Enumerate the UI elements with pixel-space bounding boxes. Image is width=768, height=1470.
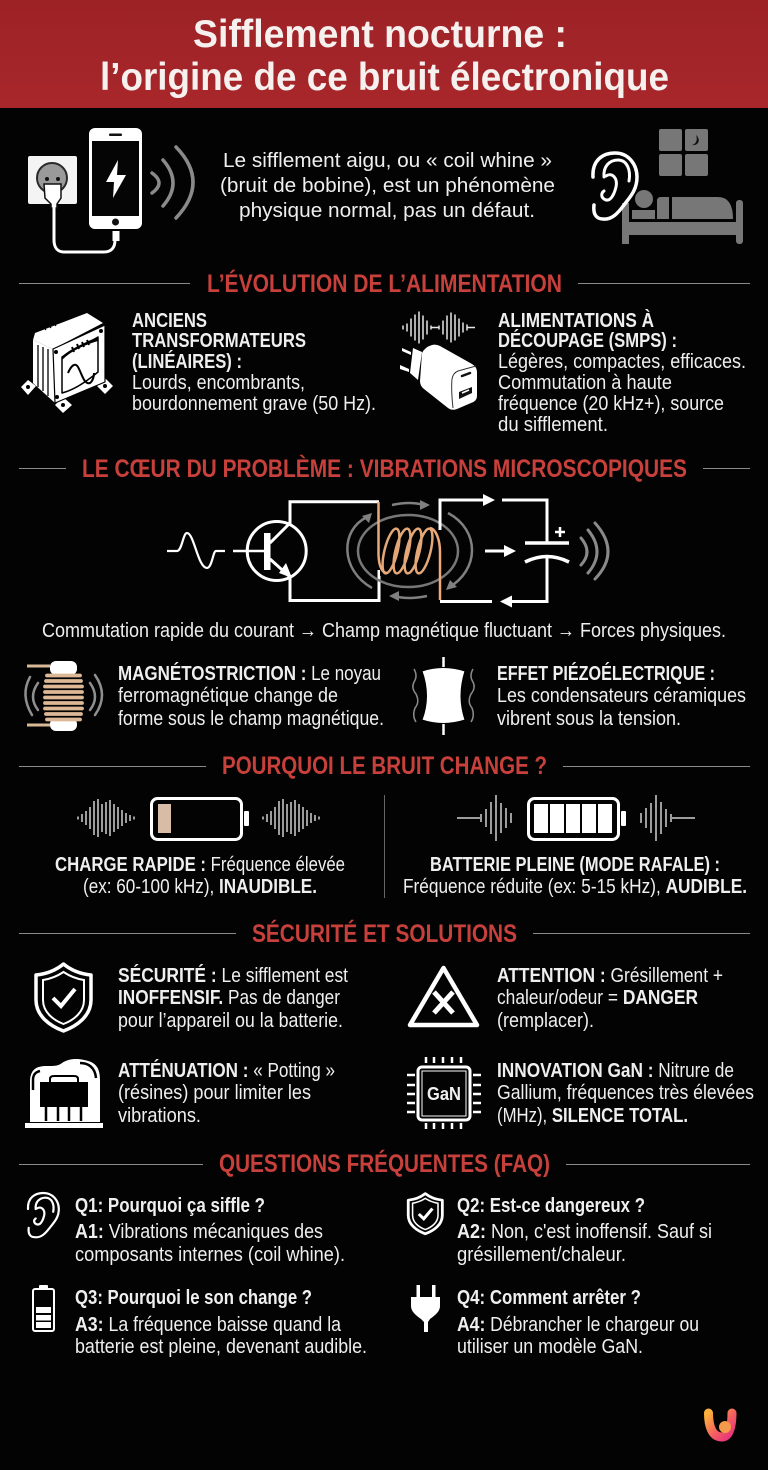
- text: Q4: Q4: Comment arrêter ?: [457, 1286, 641, 1309]
- icon: GaN chip: GaN: [427, 1084, 461, 1104]
- icon: piezo capacitor: [413, 657, 474, 735]
- text: magnetostriction: forme sous le champ magnétique.: [118, 707, 384, 730]
- text: attenuation: vibrations.: [118, 1104, 201, 1127]
- heading: safety and solutions: SÉCURITÉ ET SOLUTIONS: [252, 919, 517, 948]
- text: Q3: Q3: Pourquoi le son change ?: [75, 1286, 312, 1309]
- text: magnetostriction: MAGNÉTOSTRICTION : Le noyau: [118, 662, 381, 685]
- icon: FAQ plug: [411, 1285, 440, 1332]
- text: Q4: utiliser un modèle GaN.: [457, 1335, 643, 1358]
- text: Q1: [75, 1194, 345, 1266]
- text: switching supplies: fréquence (20 kHz+), source: [498, 392, 724, 415]
- icon: transformer: [21, 313, 113, 413]
- text: attenuation: ATTÉNUATION : « Potting »: [118, 1059, 335, 1082]
- title banner: Sifflement nocturne :: [193, 13, 567, 56]
- icon: FAQ shield: [408, 1194, 442, 1234]
- heading: evolution: L’ÉVOLUTION DE L’ALIMENTATION: [207, 269, 562, 298]
- intro text: [220, 149, 555, 222]
- text: attenuation: (résines) pour limiter les: [118, 1081, 311, 1104]
- text: piezo effect: vibrent sous la tension.: [497, 707, 681, 730]
- text: safety: pour l’appareil ou la batterie.: [118, 1009, 343, 1032]
- icon: warning triangle: [410, 968, 477, 1025]
- icon: potted component: [25, 1059, 103, 1128]
- icon: phone charging with sound waves: [28, 128, 193, 252]
- text: Q2: Q2: Est-ce dangereux ?: [457, 1194, 645, 1217]
- intro text: physique normal, pas un défaut.: [239, 199, 535, 222]
- icon: brand logo: [708, 1413, 732, 1437]
- text: Q4: A4: Débrancher le chargeur ou: [457, 1313, 699, 1336]
- icon: ear, sleeper and window: [593, 129, 743, 244]
- text: Q2: grésillement/chaleur.: [457, 1243, 626, 1266]
- title banner: [0, 0, 768, 108]
- text: Q3: [75, 1286, 367, 1358]
- panel: fast charge: CHARGE RAPIDE : Fréquence élevée: [55, 853, 345, 876]
- text: switching supplies: du sifflement.: [498, 413, 608, 436]
- text: Q2: A2: Non, c'est inoffensif. Sauf si: [457, 1220, 712, 1243]
- panel: full battery: Fréquence réduite (ex: 5-15 kHz), AUDIBLE.: [403, 875, 747, 898]
- text: piezo effect: [497, 662, 746, 730]
- title banner: l’origine de ce bruit électronique: [100, 56, 669, 99]
- text: attenuation: [118, 1059, 335, 1127]
- text: old transformers: ANCIENS: [132, 309, 207, 332]
- text: old transformers: [132, 309, 376, 415]
- divider: [384, 795, 386, 898]
- text: warning: (remplacer).: [497, 1009, 594, 1032]
- text: Q3: A3: La fréquence baisse quand la: [75, 1313, 342, 1336]
- text: magnetostriction: ferromagnétique change de: [118, 684, 338, 707]
- text: GaN innovation: [497, 1059, 754, 1127]
- text: Q1: A1: Vibrations mécaniques des: [75, 1220, 323, 1243]
- icon: FAQ ear: [28, 1193, 59, 1237]
- icon: FAQ battery: [33, 1285, 54, 1331]
- circuit diagram: [167, 494, 608, 608]
- panel: fast charge: [55, 798, 345, 898]
- panel: full battery: [403, 795, 747, 898]
- icon: GaN chip: [407, 1057, 481, 1129]
- panel: fast charge: (ex: 60-100 kHz), INAUDIBLE.: [83, 875, 317, 898]
- text: Q1: Q1: Pourquoi ça siffle ?: [75, 1194, 265, 1217]
- text: Q4: [457, 1286, 699, 1358]
- text: warning: [497, 964, 723, 1032]
- text: switching supplies: Commutation à haute: [498, 371, 672, 394]
- heading: why the noise changes: POURQUOI LE BRUIT CHANGE ?: [222, 752, 547, 780]
- intro text: Le sifflement aigu, ou « coil whine »: [223, 149, 552, 172]
- text: safety: SÉCURITÉ : Le sifflement est: [118, 964, 348, 987]
- icon: switching charger with waveform: [400, 312, 477, 410]
- text: magnetostriction: [118, 662, 384, 730]
- text: GaN innovation: (MHz), SILENCE TOTAL.: [497, 1104, 688, 1127]
- icon: magnetostriction coil: [25, 661, 102, 731]
- text: Q3: batterie est pleine, devenant audible.: [75, 1335, 367, 1358]
- text: GaN innovation: INNOVATION GaN : Nitrure de: [497, 1059, 734, 1082]
- text: warning: ATTENTION : Grésillement +: [497, 964, 723, 987]
- text: old transformers: (LINÉAIRES) :: [132, 350, 242, 373]
- heading: FAQ: QUESTIONS FRÉQUENTES (FAQ): [219, 1149, 550, 1178]
- text: old transformers: Lourds, encombrants,: [132, 371, 305, 394]
- text: Q2: [457, 1194, 712, 1266]
- intro text: (bruit de bobine), est un phénomène: [220, 174, 555, 197]
- text: old transformers: bourdonnement grave (50 Hz).: [132, 392, 376, 415]
- text: old transformers: TRANSFORMATEURS: [132, 329, 306, 352]
- text: safety: INOFFENSIF. Pas de danger: [118, 986, 340, 1009]
- text: warning: chaleur/odeur = DANGER: [497, 986, 698, 1009]
- text: piezo effect: EFFET PIÉZOÉLECTRIQUE :: [497, 662, 715, 685]
- text: Q1: composants internes (coil whine).: [75, 1243, 345, 1266]
- text: switching supplies: [498, 309, 746, 436]
- text: switching supplies: DÉCOUPAGE (SMPS) :: [498, 329, 677, 352]
- text: switching supplies: ALIMENTATIONS À: [498, 309, 654, 332]
- text: safety: [118, 964, 348, 1032]
- icon: safety shield: [36, 964, 91, 1031]
